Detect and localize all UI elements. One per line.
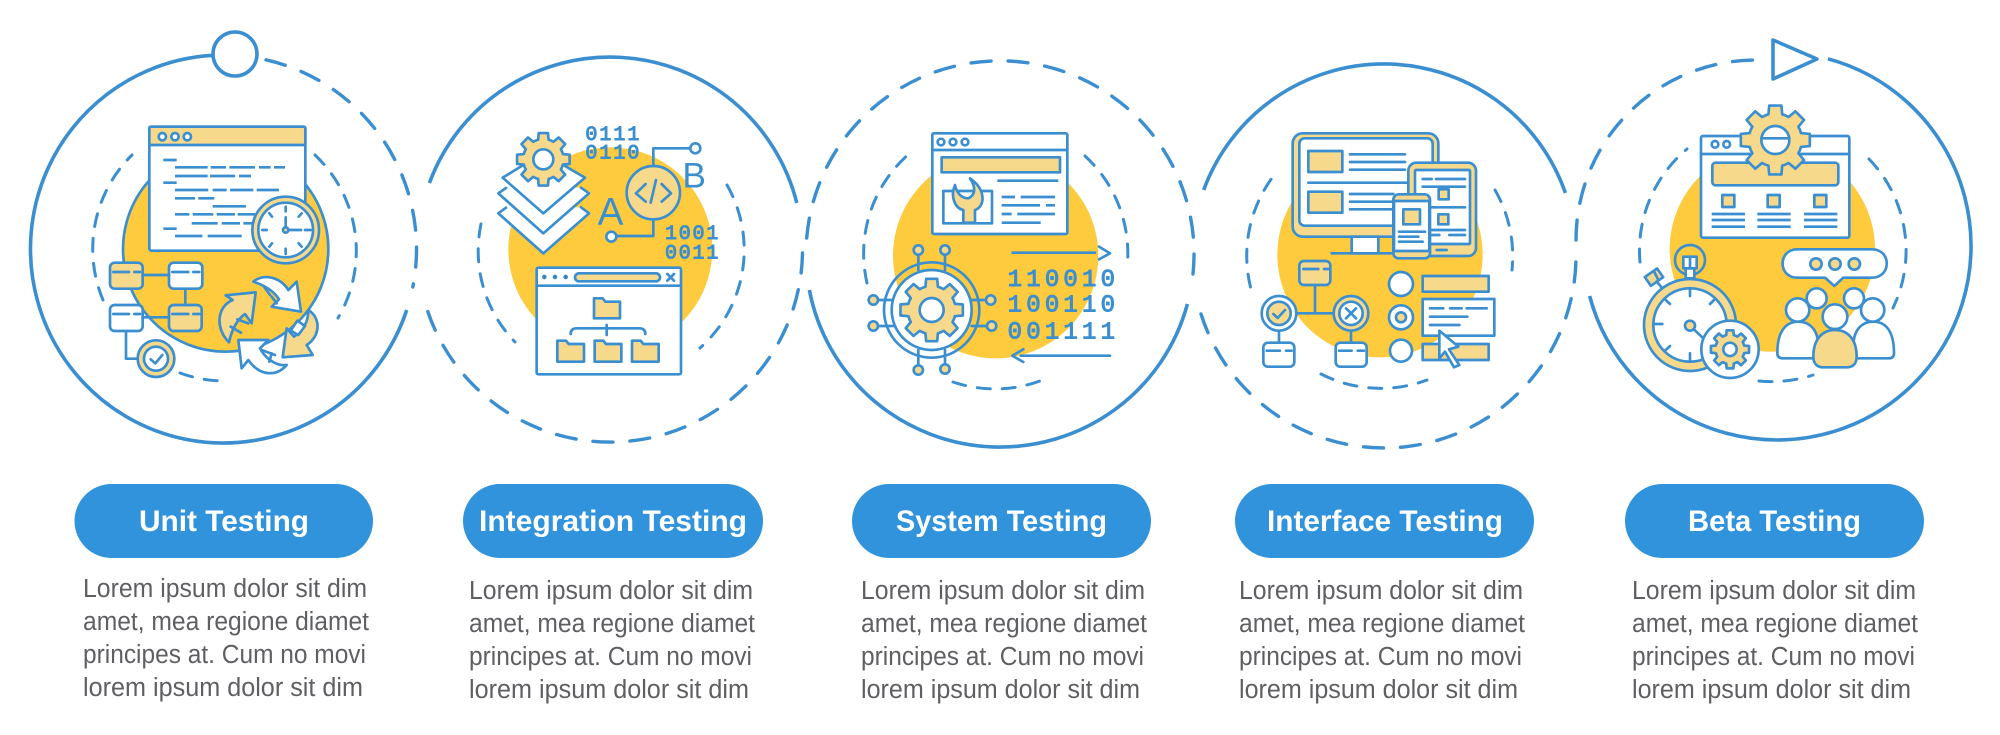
text block: Interface Testing description: principes at. Cum no movi [1239,643,1522,671]
heading pill: Unit Testing: Unit Testing [139,505,309,538]
heading pill: Interface Testing [1235,484,1534,558]
text block: Unit Testing description: principes at. Cum no movi [83,641,366,669]
text block: Unit Testing description: lorem ipsum dolor sit dim [83,674,363,702]
text block: Beta Testing description: Lorem ipsum dolor sit dim [1632,577,1916,605]
heading pill: System Testing: System Testing [896,505,1107,538]
heading pill: Integration Testing: Integration Testing [479,505,747,538]
heading pill: Beta Testing: Beta Testing [1688,505,1861,538]
text block: System Testing description: Lorem ipsum dolor sit dim [861,577,1145,605]
icon: integration testing illustration: 0011 [665,242,718,265]
heading pill: System Testing [852,484,1151,558]
heading pill: Interface Testing: Interface Testing [1267,505,1503,538]
text block: Unit Testing description: amet, mea regione diamet [83,608,369,636]
icon: interface testing illustration [1262,133,1494,367]
icon: beta testing illustration [1644,106,1894,378]
icon: integration testing illustration: 0110 [585,142,639,165]
heading pill: Integration Testing [463,484,763,558]
text block: Beta Testing description [1632,577,1918,704]
text block: Unit Testing description: Lorem ipsum dolor sit dim [83,575,367,603]
text block: Unit Testing description [83,575,369,702]
text block: Interface Testing description [1239,577,1525,704]
icon: integration testing illustration: 1001 [665,223,718,246]
text block: System Testing description: amet, mea regione diamet [861,610,1147,638]
icon: unit testing illustration [110,127,328,377]
icon: system testing illustration: 001111 [1008,319,1115,346]
icon: integration testing illustration: A [598,191,624,234]
heading pill: Beta Testing [1625,484,1924,558]
icon: system testing illustration [869,133,1115,375]
text block: Integration Testing description [469,577,755,704]
panel: integration testing circle [425,57,802,442]
text block: System Testing description [861,577,1147,704]
icon: integration testing illustration: 0111 [585,124,639,147]
text block: Beta Testing description: amet, mea regione diamet [1632,610,1918,638]
panel: beta testing circle [1576,40,1971,440]
panel: system testing circle [807,61,1194,447]
end marker triangle [1773,40,1817,79]
text block: Beta Testing description: principes at. Cum no movi [1632,643,1915,671]
icon: system testing illustration: 110010 [1008,267,1115,294]
heading pill: Unit Testing [74,484,373,558]
text block: System Testing description: lorem ipsum dolor sit dim [861,676,1140,704]
text block: Beta Testing description: lorem ipsum dolor sit dim [1632,676,1911,704]
text block: System Testing description: principes at. Cum no movi [861,643,1144,671]
text block: Integration Testing description: amet, mea regione diamet [469,610,755,638]
text block: Integration Testing description: Lorem ipsum dolor sit dim [469,577,753,605]
text block: Interface Testing description: amet, mea regione diamet [1239,610,1525,638]
text block: Interface Testing description: lorem ipsum dolor sit dim [1239,676,1518,704]
panel: interface testing circle [1198,64,1576,448]
text block: Interface Testing description: Lorem ipsum dolor sit dim [1239,577,1523,605]
icon: integration testing illustration [498,124,718,374]
text block: Integration Testing description: principes at. Cum no movi [469,643,752,671]
icon: system testing illustration: 100110 [1008,293,1115,320]
icon: integration testing illustration: B [682,156,706,195]
start marker circle [213,32,257,76]
panel: unit testing circle [30,32,417,443]
text block: Integration Testing description: lorem ipsum dolor sit dim [469,676,749,704]
